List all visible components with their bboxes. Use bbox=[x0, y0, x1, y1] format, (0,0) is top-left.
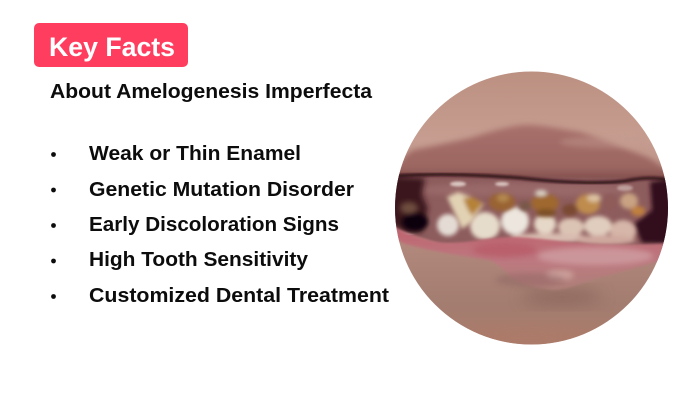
fact: genetic disorder: Genetic Mutation Disorder bbox=[89, 178, 354, 201]
fact: sensitivity: High Tooth Sensitivity bbox=[89, 248, 309, 271]
white front teeth bbox=[437, 214, 459, 236]
bullet list of key facts bbox=[51, 142, 389, 307]
fact: weak enamel: Weak or Thin Enamel bbox=[89, 142, 301, 165]
upper lip bbox=[390, 125, 674, 186]
fact: discoloration: Early Discoloration Signs bbox=[89, 213, 339, 236]
badge: Key Facts: Key Facts bbox=[49, 32, 175, 62]
dark mouth corner left bbox=[390, 176, 428, 232]
circular photo illustration: mouth with discoloured teeth bbox=[390, 68, 674, 350]
dark lip line bbox=[396, 175, 668, 183]
fact: treatment: Customized Dental Treatment bbox=[89, 284, 389, 307]
discoloured upper teeth bbox=[447, 190, 645, 229]
lower skin bbox=[398, 235, 666, 344]
lower lip bbox=[390, 224, 674, 290]
mouth interior bbox=[390, 176, 674, 248]
subtitle: About Amelogenesis Imperfecta bbox=[50, 80, 373, 103]
dark mouth corner right bbox=[634, 178, 674, 244]
badge: Key Facts bbox=[34, 23, 188, 67]
infographic canvas bbox=[34, 23, 668, 344]
upper skin bbox=[390, 68, 674, 188]
gum highlights bbox=[450, 182, 633, 191]
lower teeth bbox=[437, 207, 636, 245]
